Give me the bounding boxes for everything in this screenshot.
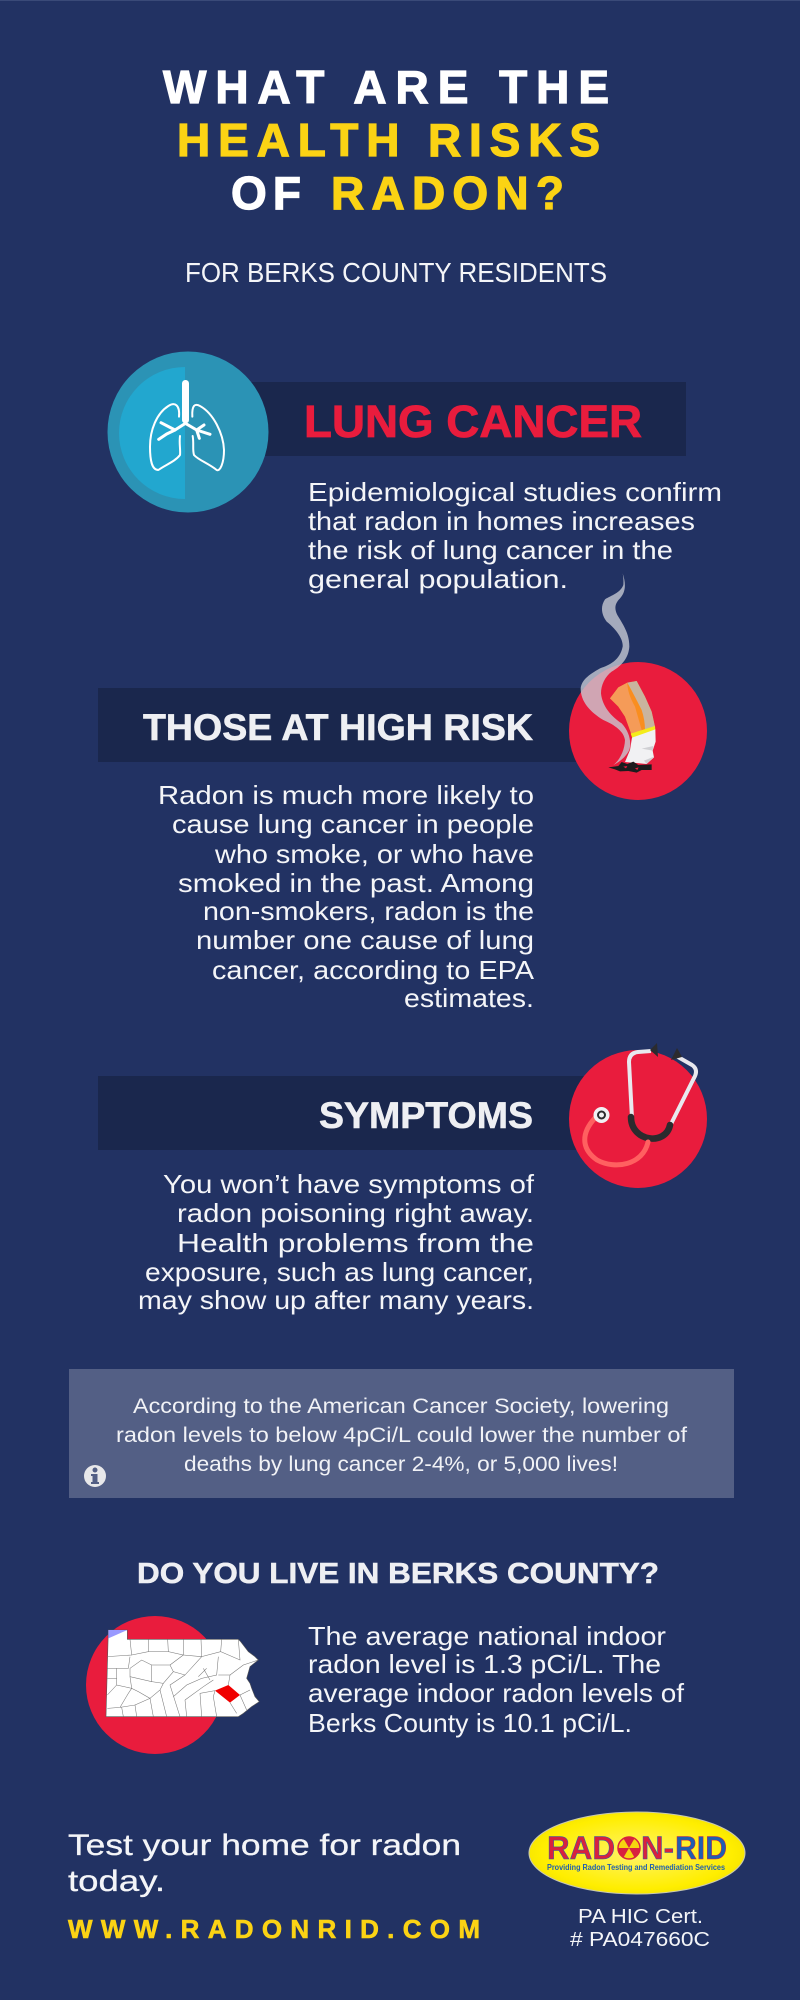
website url: WWW.RADONRID.COM <box>68 1914 480 1944</box>
panel: those at high risk <box>98 573 707 1013</box>
text block: berks county: radon level is 1.3 pCi/L. The <box>308 1649 661 1679</box>
text block: high risk: non-smokers, radon is the <box>203 896 534 926</box>
text block: symptoms: Health problems from the <box>177 1228 534 1258</box>
callout text: According to the American Cancer Society, lowering <box>133 1395 669 1418</box>
text block: berks county: average indoor radon levels of <box>308 1678 685 1708</box>
icon: info <box>84 1465 106 1487</box>
subtitle: FOR BERKS COUNTY RESIDENTS <box>185 257 607 288</box>
text block: berks county: Berks County is 10.1 pCi/L. <box>308 1708 632 1738</box>
icon: pennsylvania map <box>86 1616 259 1754</box>
text block: symptoms: radon poisoning right away. <box>177 1198 534 1228</box>
logo: radon-rid: RAD <box>547 1830 615 1866</box>
text block: high risk <box>158 780 535 1013</box>
text block: high risk: estimates. <box>404 983 534 1013</box>
text block: high risk: cancer, according to EPA <box>212 955 535 985</box>
text block: lung cancer: general population. <box>308 564 568 594</box>
certification text <box>570 1906 710 1951</box>
text block: high risk: who smoke, or who have <box>214 839 534 869</box>
callout text: radon levels to below 4pCi/L could lower the number of <box>116 1424 687 1447</box>
text block: berks county: The average national indoor <box>308 1621 666 1651</box>
panel: callout <box>69 1369 734 1498</box>
text block: high risk: number one cause of lung <box>196 925 534 955</box>
certification text: # PA047660C <box>570 1929 710 1951</box>
heading: berks county: DO YOU LIVE IN BERKS COUNTY? <box>137 1558 659 1590</box>
heading bar: high risk <box>98 688 588 762</box>
call to action: today. <box>68 1865 165 1898</box>
text block: lung cancer <box>308 477 722 594</box>
title: OF <box>231 167 301 219</box>
heading bar: lung cancer <box>250 382 686 456</box>
text block: lung cancer: Epidemiological studies confirm <box>308 477 722 507</box>
heading bar: symptoms <box>98 1076 588 1150</box>
callout text <box>116 1395 687 1476</box>
call to action <box>68 1829 461 1898</box>
icon: lungs <box>108 352 268 512</box>
heading: symptoms: SYMPTOMS <box>319 1095 533 1136</box>
text block: symptoms: exposure, such as lung cancer, <box>145 1257 534 1287</box>
panel: lung cancer <box>108 352 722 594</box>
text block: symptoms <box>138 1169 535 1315</box>
text block: high risk: cause lung cancer in people <box>172 809 534 839</box>
call to action: Test your home for radon <box>68 1829 461 1862</box>
logo: radon-rid <box>529 1812 745 1894</box>
text block: high risk: Radon is much more likely to <box>158 780 534 810</box>
text block: lung cancer: that radon in homes increases <box>308 506 695 536</box>
heading: lung cancer: LUNG CANCER <box>304 396 642 447</box>
icon: smoke <box>581 573 630 765</box>
logo: radon-rid: Providing Radon Testing and Remediation Services <box>547 1863 726 1872</box>
logo: radon-rid: N- <box>641 1830 674 1866</box>
panel: symptoms <box>98 1043 707 1315</box>
logo: radon-rid: RID <box>675 1830 727 1866</box>
text block: symptoms: You won’t have symptoms of <box>163 1169 535 1199</box>
text block: symptoms: may show up after many years. <box>138 1285 534 1315</box>
text block: lung cancer: the risk of lung cancer in the <box>308 535 673 565</box>
heading: those at high risk: THOSE AT HIGH RISK <box>143 707 533 748</box>
title: WHAT ARE THE <box>163 61 609 113</box>
icon: stethoscope <box>569 1043 707 1188</box>
title <box>163 61 609 219</box>
text block: high risk: smoked in the past. Among <box>178 868 534 898</box>
text block: berks county <box>308 1621 685 1738</box>
title: HEALTH RISKS <box>177 114 600 166</box>
icon: cigarette <box>569 662 707 800</box>
certification text: PA HIC Cert. <box>578 1906 703 1928</box>
callout text: deaths by lung cancer 2-4%, or 5,000 lives! <box>184 1453 618 1476</box>
title: RADON? <box>331 167 564 219</box>
